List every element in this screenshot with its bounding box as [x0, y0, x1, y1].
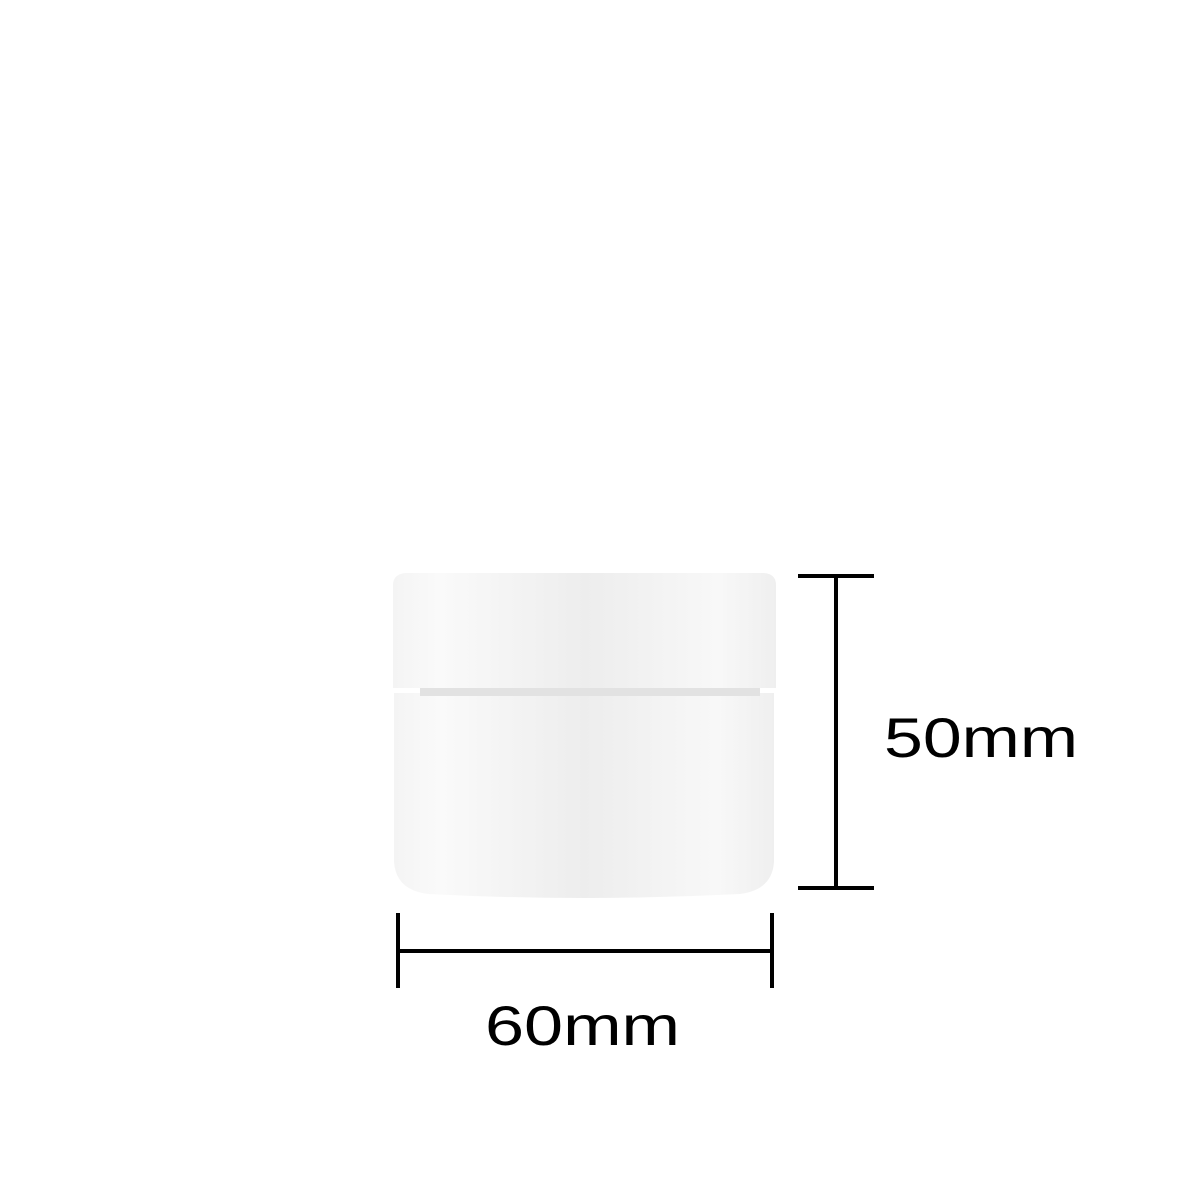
jar neck band — [420, 688, 760, 696]
height dimension line — [798, 576, 874, 888]
width dimension line — [398, 913, 772, 988]
jar lid — [393, 573, 776, 688]
label: 60mm: 60mm — [485, 994, 680, 1057]
jar — [393, 573, 776, 898]
jar body — [394, 693, 774, 898]
label: 50mm: 50mm — [884, 706, 1078, 769]
